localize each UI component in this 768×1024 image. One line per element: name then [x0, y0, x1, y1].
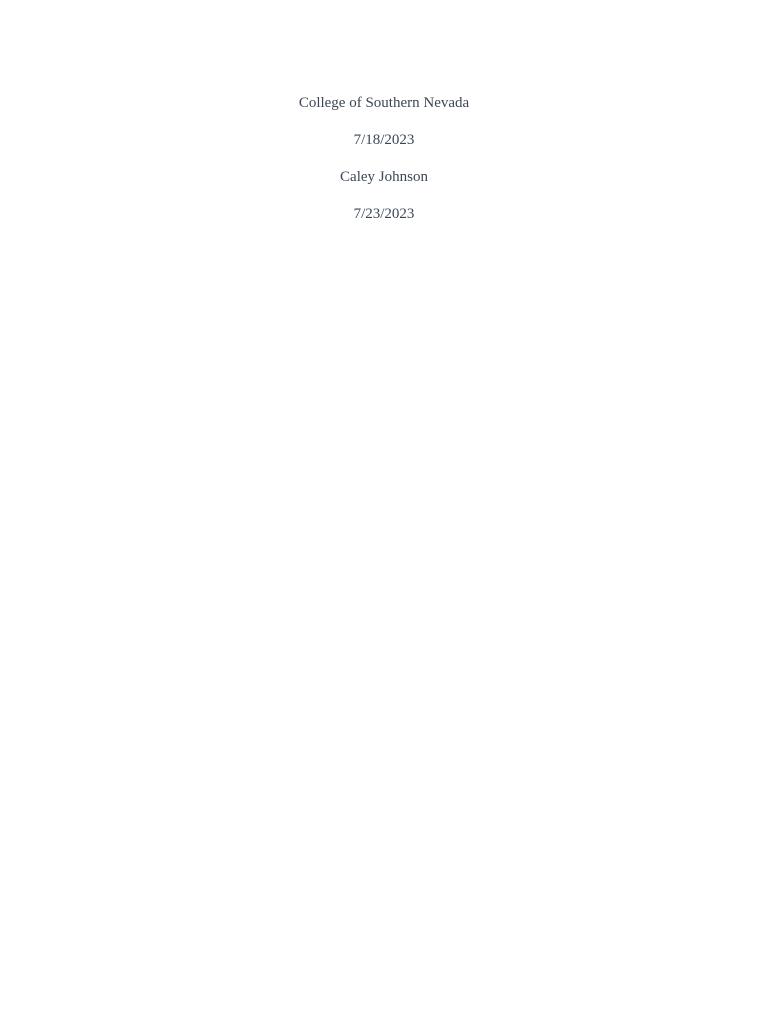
author name: Caley Johnson	[340, 169, 428, 185]
institution name: College of Southern Nevada	[299, 95, 469, 111]
text block: title page	[299, 95, 469, 222]
date 2: 7/23/2023	[354, 206, 414, 222]
date 1: 7/18/2023	[354, 132, 414, 148]
